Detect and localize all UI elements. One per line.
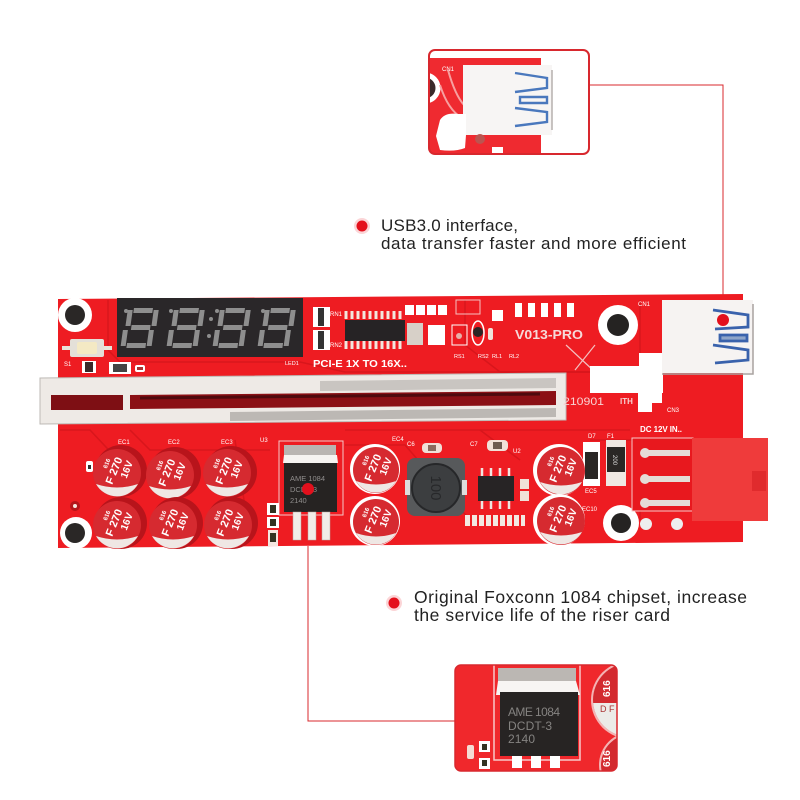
regulator chip U3: AME 1084 bbox=[290, 474, 325, 483]
capacitor EC2: F 270 bbox=[157, 458, 178, 488]
LED display bbox=[117, 298, 303, 357]
capacitor EC9: 616 bbox=[362, 506, 372, 519]
capacitor EC10 bbox=[533, 494, 585, 546]
pcb bbox=[58, 294, 768, 548]
capacitor EC3: 616 bbox=[213, 457, 223, 470]
mounting hole: bottom left bbox=[60, 517, 92, 549]
callout text: USB3.0 bbox=[354, 216, 686, 253]
inset: regulator chip close-up: DCDT-3 bbox=[508, 719, 552, 733]
inset: regulator chip close-up: 616 bbox=[602, 680, 613, 697]
capacitor EC7: F 270 bbox=[160, 508, 181, 538]
capacitor EC3 bbox=[203, 446, 257, 498]
board labels: EC5 bbox=[585, 489, 597, 495]
capacitor EC8 bbox=[204, 497, 258, 549]
board labels: EC2 bbox=[168, 440, 180, 446]
blue contacts bbox=[515, 73, 547, 126]
mounting hole: bottom right bbox=[603, 505, 639, 541]
board labels: RL1 bbox=[492, 354, 502, 360]
capacitor EC8: F 270 bbox=[215, 508, 236, 538]
board labels: RL2 bbox=[509, 354, 519, 360]
capacitor EC7: 16V bbox=[175, 511, 192, 532]
resistor networks bbox=[313, 307, 330, 350]
board labels: C7 bbox=[470, 442, 478, 448]
white clip bbox=[436, 114, 466, 151]
board labels: S1 bbox=[64, 362, 72, 368]
inset: regulator chip close-up: 616 bbox=[602, 750, 613, 767]
callout text: chipset bbox=[386, 587, 747, 625]
board labels: EC3 bbox=[221, 440, 233, 446]
seven-segment digits bbox=[120, 308, 296, 348]
regulator chip U3 bbox=[279, 441, 343, 540]
date code bbox=[563, 396, 633, 408]
text block: USB3.0 interface, bbox=[381, 216, 518, 235]
text block: data transfer faster and more efficient bbox=[381, 234, 686, 253]
inductor: 100 bbox=[427, 475, 444, 501]
board labels: RS2 bbox=[478, 354, 489, 360]
callout line: USB bbox=[589, 85, 723, 295]
text block: the service life of the riser card bbox=[414, 605, 670, 625]
callout line: chipset bbox=[308, 546, 455, 721]
regulator chip U3: 2140 bbox=[290, 496, 307, 505]
capacitor EC5 bbox=[533, 444, 585, 496]
capacitor EC3: 16V bbox=[229, 459, 246, 480]
capacitors bbox=[93, 444, 585, 549]
board labels: RN2 bbox=[330, 343, 343, 349]
inset: USB connector close-up bbox=[412, 50, 589, 155]
text block bbox=[381, 216, 686, 253]
USB 3.0 connector bbox=[662, 300, 753, 374]
capacitor EC7 bbox=[149, 497, 203, 549]
small parts beside chip bbox=[70, 461, 279, 546]
capacitor EC6: 16V bbox=[119, 511, 136, 532]
pcb traces bbox=[60, 300, 640, 540]
slot opening: long bbox=[130, 391, 556, 409]
board labels: EC4 bbox=[392, 437, 404, 443]
inset: USB connector close-up: CN1 bbox=[442, 67, 455, 73]
capacitor EC7: 616 bbox=[159, 509, 169, 522]
recycle mark bbox=[566, 345, 595, 372]
capacitor EC5: 616 bbox=[547, 455, 557, 468]
callout marker: USB bbox=[717, 314, 729, 326]
inductor bbox=[405, 458, 467, 516]
capacitor EC3: F 270 bbox=[214, 456, 235, 486]
board labels: U2 bbox=[513, 449, 521, 455]
capacitor EC4 bbox=[350, 444, 400, 494]
capacitor EC4: 616 bbox=[362, 454, 372, 467]
capacitor EC6: 616 bbox=[103, 509, 113, 522]
board labels bbox=[64, 302, 682, 513]
USB body bbox=[463, 65, 552, 135]
capacitor EC6: F 270 bbox=[104, 508, 125, 538]
fuse and diode bbox=[583, 440, 626, 486]
capacitor edges bbox=[591, 666, 616, 736]
slot opening: short bbox=[51, 395, 123, 410]
small components, top middle bbox=[405, 300, 595, 372]
board labels: CN3 bbox=[667, 408, 680, 414]
capacitor EC10: F 270 bbox=[548, 504, 569, 534]
side parts bbox=[479, 741, 490, 752]
blue contacts bbox=[713, 310, 748, 363]
panel: riser card board bbox=[40, 294, 768, 549]
capacitor EC2: 16V bbox=[172, 461, 189, 482]
white retention clip bbox=[590, 353, 663, 412]
capacitor EC4: 16V bbox=[378, 456, 395, 477]
capacitor EC10: 16V bbox=[563, 507, 580, 528]
capacitor EC1: 16V bbox=[119, 459, 136, 480]
board labels: RS1 bbox=[454, 354, 465, 360]
bullet bbox=[354, 218, 370, 234]
board labels: EC10 bbox=[582, 507, 598, 513]
inset frame bbox=[429, 50, 589, 154]
small SMD components, left bbox=[82, 361, 145, 374]
capacitor EC9: F 270 bbox=[363, 505, 384, 535]
capacitor EC6 bbox=[93, 497, 147, 549]
inset: regulator chip close-up: 2140 bbox=[508, 732, 535, 746]
bullet bbox=[386, 595, 402, 611]
capacitor EC1: 616 bbox=[103, 457, 113, 470]
pins bbox=[640, 448, 690, 508]
inset: regulator chip close-up: D F bbox=[600, 704, 615, 714]
board labels: CN1 bbox=[638, 302, 651, 308]
date code: 210901 bbox=[563, 396, 604, 408]
board labels: PCI-E 1X TO 16X.. bbox=[313, 358, 407, 370]
board labels: RN1 bbox=[330, 312, 343, 318]
board labels: C6 bbox=[407, 442, 415, 448]
PCIe slot bbox=[40, 373, 566, 424]
fuse and diode: 200 bbox=[611, 455, 617, 466]
board labels: EC1 bbox=[118, 440, 130, 446]
slot housing bbox=[40, 373, 566, 424]
worn metal strips bbox=[320, 378, 556, 391]
board labels: F1 bbox=[607, 434, 615, 440]
inset: regulator chip close-up bbox=[454, 664, 618, 772]
board labels: LED1 bbox=[285, 361, 299, 367]
regulator chip U3: DCDT-3 bbox=[290, 485, 317, 494]
controller U2 and small parts bbox=[422, 440, 683, 530]
chip legs bbox=[293, 512, 330, 540]
chip legs bbox=[512, 756, 560, 768]
date code: ITH bbox=[620, 397, 633, 406]
text block: Original Foxconn 1084 chipset, increase bbox=[414, 587, 747, 607]
capacitor EC2: 616 bbox=[156, 459, 166, 472]
reset button S1 bbox=[62, 339, 112, 357]
capacitor EC2 bbox=[146, 447, 201, 499]
callout marker: chipset bbox=[302, 483, 314, 495]
mounting hole: top right bbox=[598, 305, 638, 345]
capacitor EC10: 616 bbox=[547, 505, 557, 518]
power connector bbox=[632, 438, 768, 521]
capacitor EC9: 16V bbox=[378, 508, 395, 529]
text block bbox=[414, 587, 747, 625]
capacitor EC4: F 270 bbox=[363, 453, 384, 483]
board labels: D7 bbox=[588, 434, 596, 440]
capacitor EC5: 16V bbox=[563, 457, 580, 478]
capacitor EC8: 16V bbox=[230, 511, 247, 532]
inset frame bbox=[455, 665, 617, 771]
board labels: U3 bbox=[260, 438, 268, 444]
resistor row bbox=[465, 515, 525, 526]
capacitor EC1: F 270 bbox=[104, 456, 125, 486]
capacitor EC8: 616 bbox=[214, 509, 224, 522]
capacitor EC1 bbox=[93, 445, 147, 497]
board labels: V013-PRO bbox=[515, 327, 583, 342]
controller IC U1 bbox=[345, 311, 405, 349]
inset: regulator chip close-up: AME 1084 bbox=[508, 705, 560, 719]
capacitor EC9 bbox=[350, 496, 400, 546]
capacitor EC5: F 270 bbox=[548, 454, 569, 484]
board labels: DC 12V IN.. bbox=[640, 425, 682, 434]
mounting hole: top left bbox=[58, 298, 92, 332]
